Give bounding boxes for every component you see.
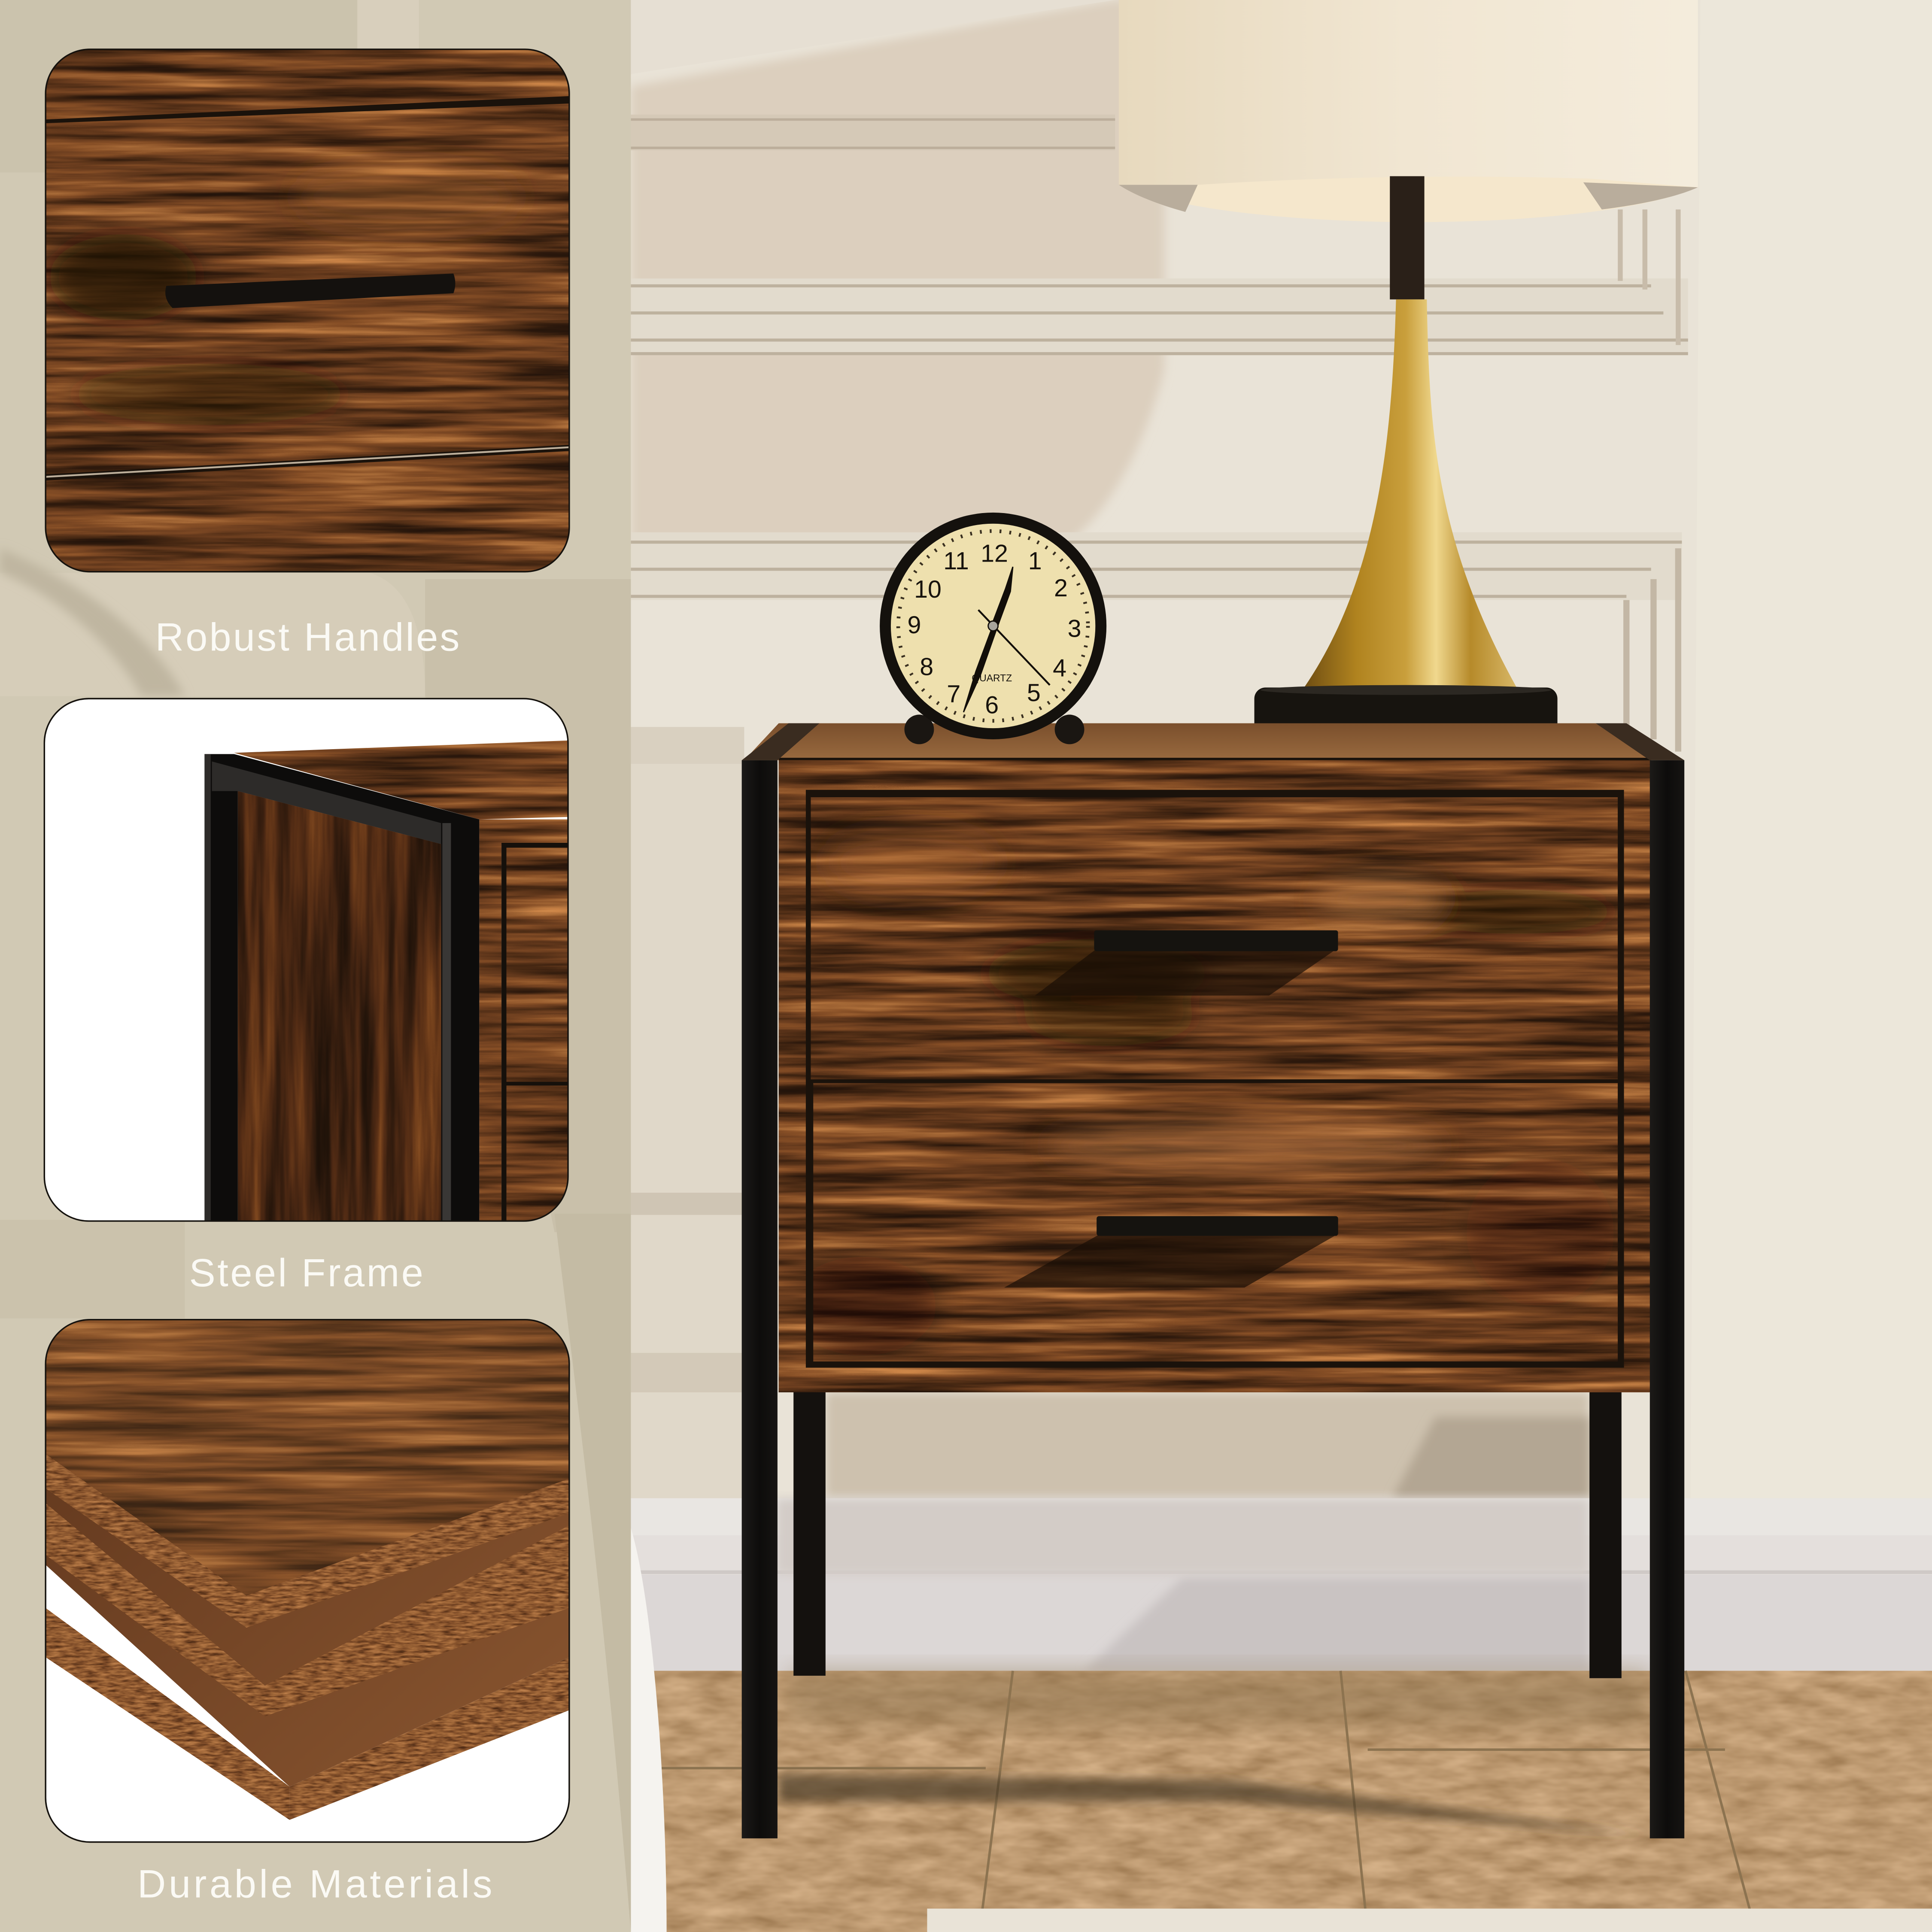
front stile xyxy=(479,843,501,1221)
panel: steel frame xyxy=(44,699,568,1221)
wooden floor xyxy=(631,1671,1932,1932)
clock hands xyxy=(963,567,1050,712)
top board xyxy=(46,1320,569,1596)
clock numerals: 6 xyxy=(985,692,999,719)
carcass front xyxy=(779,758,1651,1392)
clock face xyxy=(891,524,1095,728)
clock numerals: 2 xyxy=(1054,574,1068,602)
label: steel frame: Steel Frame xyxy=(189,1251,423,1295)
alarm clock xyxy=(880,513,1106,744)
clock numerals: 3 xyxy=(1068,615,1081,643)
clock numerals: 11 xyxy=(943,547,969,575)
steel frame xyxy=(204,754,479,1221)
clock numerals: 12 xyxy=(981,540,1008,568)
nightstand xyxy=(742,723,1684,1838)
drawer fronts xyxy=(507,848,568,1082)
clock numerals: 5 xyxy=(1027,679,1041,707)
clock numerals: 9 xyxy=(908,611,921,639)
panel: durable materials xyxy=(46,1320,569,1842)
panel: robust handles xyxy=(46,49,569,572)
left sidebar xyxy=(0,0,631,1932)
bottom board xyxy=(46,1320,569,1786)
wall moulding xyxy=(631,115,1688,1392)
bottom handle xyxy=(1097,1216,1338,1236)
bottom drawer xyxy=(789,1083,1618,1361)
left steel leg xyxy=(742,760,778,1838)
right steel leg xyxy=(1650,760,1684,1838)
cabinet top xyxy=(234,741,568,819)
steel top corners xyxy=(742,723,1684,760)
table top surface xyxy=(744,723,1651,760)
top drawer xyxy=(811,797,1618,1079)
drawer front xyxy=(46,103,569,474)
clock numerals xyxy=(908,540,1081,719)
label: durable materials: Durable Materials xyxy=(137,1862,492,1906)
clock feet xyxy=(905,715,1084,744)
lamp base xyxy=(1255,685,1558,745)
middle board xyxy=(46,1503,265,1716)
room photo background xyxy=(631,0,1932,1932)
clock numerals: 7 xyxy=(947,680,960,708)
clock numerals: 1 xyxy=(1028,547,1042,575)
lamp rod xyxy=(1390,176,1425,299)
lamp shade xyxy=(1119,0,1698,222)
back legs xyxy=(793,1392,1622,1678)
clock numerals: 8 xyxy=(920,653,933,681)
baseboard xyxy=(631,1498,1932,1671)
bottom handle shadow xyxy=(1004,1235,1337,1288)
faded background shapes xyxy=(0,0,631,1932)
side panel xyxy=(238,791,441,1221)
wall shadow from lamp shade xyxy=(631,0,1164,548)
lower drawer xyxy=(46,451,569,572)
top strip xyxy=(46,49,569,119)
clock body xyxy=(880,513,1106,739)
top handle xyxy=(1094,930,1338,951)
label: robust handles: Robust Handles xyxy=(155,615,459,659)
table lamp xyxy=(1119,0,1698,745)
bed sheet xyxy=(631,1528,667,1932)
handle xyxy=(165,273,455,308)
clock numerals: 4 xyxy=(1053,655,1066,682)
front rail xyxy=(479,819,568,844)
clock numerals: 10 xyxy=(914,576,942,603)
clock numerals: QUARTZ xyxy=(972,672,1012,683)
brass stem xyxy=(1302,299,1518,690)
top handle shadow xyxy=(1035,949,1337,996)
